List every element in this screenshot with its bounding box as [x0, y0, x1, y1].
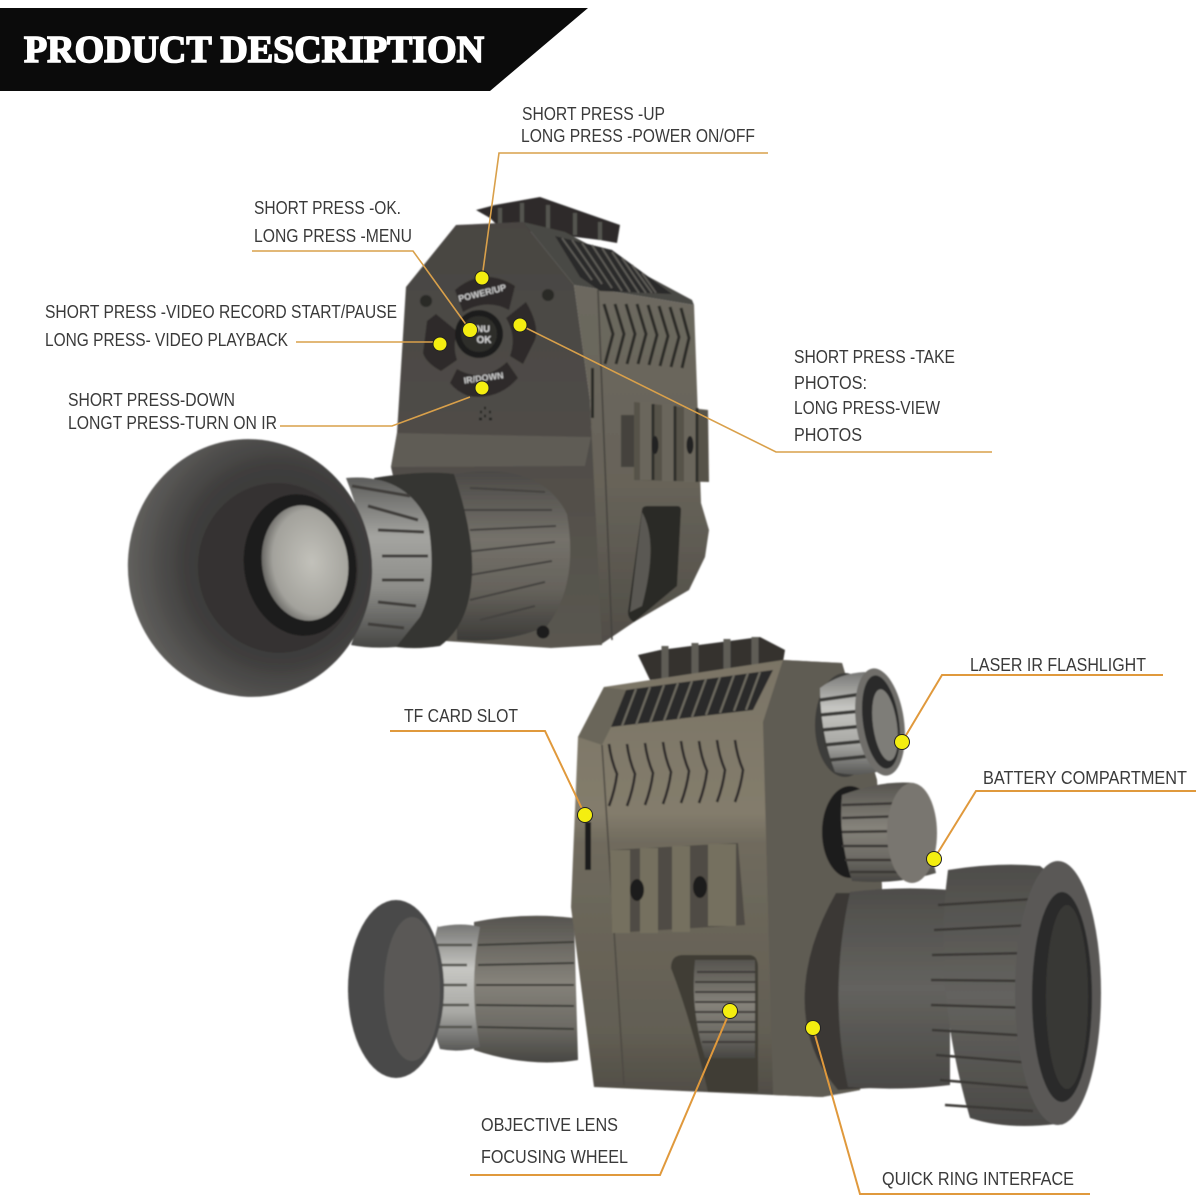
- quick ring interface: [805, 893, 870, 1090]
- eyepiece barrel: [474, 916, 578, 1062]
- side rail: [610, 843, 745, 933]
- eyecup: [348, 900, 444, 1078]
- side vent chevrons: [604, 304, 689, 368]
- callout: ok menu button: [252, 197, 478, 338]
- callout: video button: SHORT PRESS -VIDEO RECORD START/PAUSE: [45, 301, 397, 322]
- callout: photo button: [513, 318, 992, 452]
- callout: down IR button: SHORT PRESS-DOWN: [68, 389, 235, 410]
- silver focus ring: [346, 478, 432, 648]
- control buttons: POWER/UP: [457, 282, 507, 304]
- front vent chevrons: [609, 740, 743, 806]
- laser IR flashlight: [815, 665, 911, 779]
- callout: TF card slot: TF CARD SLOT: [404, 705, 518, 726]
- title banner: [0, 8, 588, 91]
- callout: photo button: PHOTOS:: [794, 372, 867, 393]
- eyecup: [111, 423, 389, 713]
- device: front view of night vision scope: [348, 637, 1101, 1126]
- mount cutout and wheel: [628, 506, 681, 622]
- mount cutout: [671, 955, 758, 1092]
- eyepiece glass: [254, 500, 356, 626]
- control buttons: [423, 277, 536, 397]
- callout: video button: [45, 301, 447, 351]
- callout: TF card slot: [390, 705, 592, 822]
- title text: PRODUCT DESCRIPTION: [24, 29, 484, 71]
- callout: laser IR flashlight: LASER IR FLASHLIGHT: [970, 654, 1146, 675]
- roof with vent slats: [523, 222, 694, 305]
- callout: objective lens focusing wheel: OBJECTIVE LENS: [481, 1114, 618, 1135]
- objective ring: [931, 861, 1101, 1126]
- eyepiece silver ring: [423, 924, 480, 1051]
- top rail: [638, 637, 785, 680]
- control buttons: ENU: [470, 324, 490, 335]
- callout: power up button: [475, 103, 768, 285]
- top rail: [476, 197, 620, 243]
- callout: ok menu button: SHORT PRESS -OK.: [254, 197, 401, 218]
- callout: objective lens focusing wheel: [470, 1004, 738, 1175]
- battery compartment: [822, 782, 937, 883]
- body front face: [391, 222, 602, 648]
- callout: quick ring interface: QUICK RING INTERFACE: [882, 1168, 1074, 1189]
- slots and screws: [420, 289, 594, 419]
- top vent slats: [611, 670, 773, 727]
- objective barrel: [455, 471, 570, 641]
- callout: ok menu button: LONG PRESS -MENU: [254, 225, 412, 246]
- body side panel: [574, 285, 709, 645]
- callout: objective lens focusing wheel: FOCUSING WHEEL: [481, 1146, 628, 1167]
- callout: down IR button: LONGT PRESS-TURN ON IR: [68, 412, 277, 433]
- callout: video button: LONG PRESS- VIDEO PLAYBACK: [45, 329, 289, 350]
- callout: quick ring interface: [806, 1020, 1090, 1194]
- focusing wheel: [694, 960, 755, 1058]
- callout: battery compartment: [926, 767, 1196, 866]
- callout: power up button: SHORT PRESS -UP: [522, 103, 665, 124]
- control buttons: OK: [476, 335, 492, 346]
- callout: power up button: LONG PRESS -POWER ON/OFF: [521, 125, 755, 146]
- device: rear view of night vision scope: [111, 197, 709, 713]
- callout: photo button: PHOTOS: [794, 424, 862, 445]
- dark ring: [374, 473, 472, 648]
- side rail: [621, 402, 709, 482]
- TF card slot: [585, 822, 591, 870]
- callout: photo button: LONG PRESS-VIEW: [794, 397, 940, 418]
- callout: down IR button: [68, 381, 489, 433]
- callout: photo button: SHORT PRESS -TAKE: [794, 346, 955, 367]
- screw: [536, 626, 550, 638]
- objective lens barrel: [838, 888, 950, 1089]
- body: [571, 660, 882, 1097]
- control buttons: IR/DOWN: [463, 370, 504, 386]
- callout: laser IR flashlight: [894, 654, 1163, 750]
